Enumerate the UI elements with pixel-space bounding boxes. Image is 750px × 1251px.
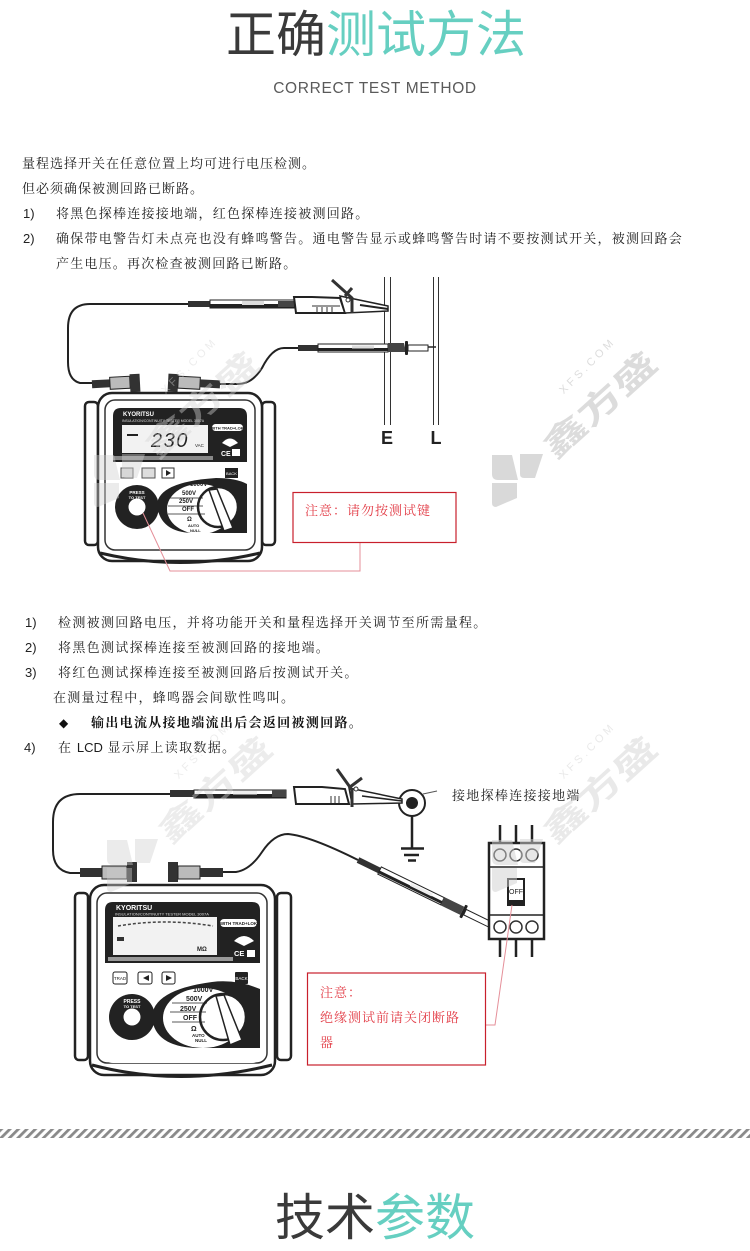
E and L circuit lines: L	[430, 428, 442, 448]
text block: voltage check intro	[22, 156, 683, 271]
warning callout: switch off breaker: 绝缘测试前请关闭断路	[320, 1010, 460, 1025]
tester: KYORITSU analogue scale: BACK	[235, 976, 248, 981]
tester: KYORITSU 230 V reading: BACK	[226, 471, 237, 476]
tester: KYORITSU 230 V reading: NULL	[190, 528, 201, 533]
watermark: top left: 鑫方盛	[138, 345, 266, 465]
watermark: bottom right	[492, 720, 664, 892]
text block: measurement steps: 将黑色测试探棒连接至被测回路的接地端。	[58, 640, 330, 655]
tester: KYORITSU 230 V reading: CE	[221, 451, 231, 458]
watermark: top right: XFS.COM	[557, 335, 619, 397]
text block: voltage check intro: 量程选择开关在任意位置上均可进行电压检测。	[22, 156, 316, 171]
text block: measurement steps: 在测量过程中，蜂鸣器会间歇性鸣叫。	[53, 690, 295, 706]
watermark: bottom left: 鑫方盛	[151, 730, 279, 850]
tester: KYORITSU analogue scale: OFF	[183, 1015, 198, 1022]
tester: KYORITSU analogue scale: TRAD	[114, 976, 127, 981]
warning callout: do not press test key	[143, 492, 456, 571]
tester: KYORITSU 230 V reading: AUTO	[188, 523, 199, 528]
text block: voltage check intro: 产生电压。再次检查被测回路已断路。	[56, 256, 297, 271]
warning callout: switch off breaker	[308, 905, 512, 1065]
tester: KYORITSU 230 V reading: INSULATION/CONTINUITY TESTER MODEL 3007A	[122, 419, 205, 423]
tester: KYORITSU 230 V reading: 500V	[182, 491, 196, 497]
ground symbol	[399, 790, 437, 860]
red test probe	[223, 834, 493, 931]
earth probe label: 接地探棒连接接地端	[452, 788, 581, 803]
tester: KYORITSU 230 V reading: OFF	[182, 507, 194, 513]
warning callout: do not press test key: 注意：请勿按测试键	[305, 503, 431, 518]
section divider: hatched band	[0, 1129, 750, 1138]
test lead connectors	[80, 862, 223, 882]
tester: KYORITSU 230 V reading: TO TEST	[129, 495, 146, 500]
watermark: top left	[94, 335, 266, 507]
red test probe	[220, 341, 436, 384]
watermark: bottom left: XFS.COM	[172, 720, 234, 782]
text block: voltage check intro: 但必须确保被测回路已断路。	[22, 181, 204, 196]
tester: KYORITSU analogue scale: AUTO	[192, 1033, 205, 1038]
tester: KYORITSU 230 V reading: PRESS	[129, 490, 145, 495]
black test lead and alligator clip	[53, 769, 402, 873]
watermark: bottom right: XFS.COM	[557, 720, 619, 782]
text block: measurement steps	[24, 615, 488, 755]
tester: KYORITSU 230 V reading: 230	[150, 430, 189, 452]
text block: voltage check intro: 2)	[23, 231, 35, 246]
circuit breaker	[489, 825, 544, 957]
text block: measurement steps: 4)	[24, 740, 36, 755]
tester: KYORITSU 230 V reading: KYORITSU	[123, 412, 154, 418]
tester: KYORITSU 230 V reading: WITH TRAD+LOK	[210, 426, 244, 430]
text block: voltage check intro: 1)	[23, 206, 35, 221]
text block: voltage check intro: 确保带电警告灯未点亮也没有蜂鸣警告。通电警告显示或蜂鸣警告时请不要按测试开关，被测回路会	[56, 231, 683, 247]
tester: KYORITSU 230 V reading: 250V	[179, 499, 193, 505]
warning callout: switch off breaker: 注意：	[320, 985, 362, 1000]
tester: KYORITSU analogue scale: KYORITSU	[116, 905, 152, 912]
text block: measurement steps: 2)	[25, 640, 37, 655]
circuit breaker: OFF	[509, 889, 523, 896]
watermark: top left: XFS.COM	[159, 335, 221, 397]
tester: KYORITSU 230 V reading: Ω	[187, 517, 192, 523]
tester: KYORITSU analogue scale: MΩ	[197, 947, 207, 953]
tester: KYORITSU analogue scale: NULL	[195, 1038, 207, 1043]
text block: measurement steps: 将红色测试探棒连接至被测回路后按测试开关。	[58, 665, 359, 680]
tester: KYORITSU 230 V reading	[85, 393, 275, 562]
subtitle: CORRECT TEST METHOD	[273, 80, 477, 97]
text block: measurement steps: 输出电流从接地端流出后会返回被测回路。	[91, 715, 363, 730]
tester: KYORITSU 230 V reading: 1000V	[190, 482, 207, 488]
text block: measurement steps: ◆	[59, 716, 69, 730]
tester: KYORITSU analogue scale: WITH TRAD+LOK	[220, 921, 258, 926]
tester: KYORITSU analogue scale: 1000V	[193, 987, 214, 994]
diagram: insulation test wiring	[53, 769, 544, 1076]
text block: voltage check intro: 将黑色探棒连接接地端，红色探棒连接被测回路。	[56, 206, 370, 222]
tester: KYORITSU analogue scale: PRESS	[124, 999, 141, 1005]
text block: measurement steps: 1)	[25, 615, 37, 630]
tester: KYORITSU analogue scale: TO TEST	[124, 1004, 141, 1009]
tester: KYORITSU analogue scale: CE	[234, 949, 244, 958]
tester: KYORITSU analogue scale: 500V	[186, 996, 203, 1003]
E and L circuit lines: E	[381, 428, 393, 448]
watermark: bottom left	[107, 720, 279, 892]
text block: measurement steps: 检测被测回路电压，并将功能开关和量程选择开关调节至所需量程。	[58, 615, 488, 631]
tester: KYORITSU analogue scale: INSULATION/CONTINUITY TESTER MODEL 3007A	[115, 912, 209, 916]
watermark: top right	[492, 335, 664, 507]
text block: measurement steps: 在 LCD 显示屏上读取数据。	[58, 740, 236, 755]
title: 正确测试方法	[226, 7, 526, 63]
watermark: top right: 鑫方盛	[536, 345, 664, 465]
tester: KYORITSU analogue scale	[75, 885, 291, 1076]
tester: KYORITSU 230 V reading: VAC	[195, 443, 205, 448]
text block: measurement steps: 3)	[25, 665, 37, 680]
test lead connectors	[92, 374, 220, 394]
warning callout: switch off breaker: 器	[320, 1035, 334, 1050]
tester: KYORITSU analogue scale: 250V	[180, 1006, 197, 1013]
diagram: voltage check wiring	[68, 277, 442, 562]
heading: technical parameters: 技术参数	[275, 1190, 475, 1246]
tester: KYORITSU analogue scale: Ω	[191, 1026, 197, 1033]
E and L circuit lines	[381, 277, 442, 448]
black test lead and alligator clip	[68, 280, 388, 383]
watermark: bottom right: 鑫方盛	[536, 730, 664, 850]
